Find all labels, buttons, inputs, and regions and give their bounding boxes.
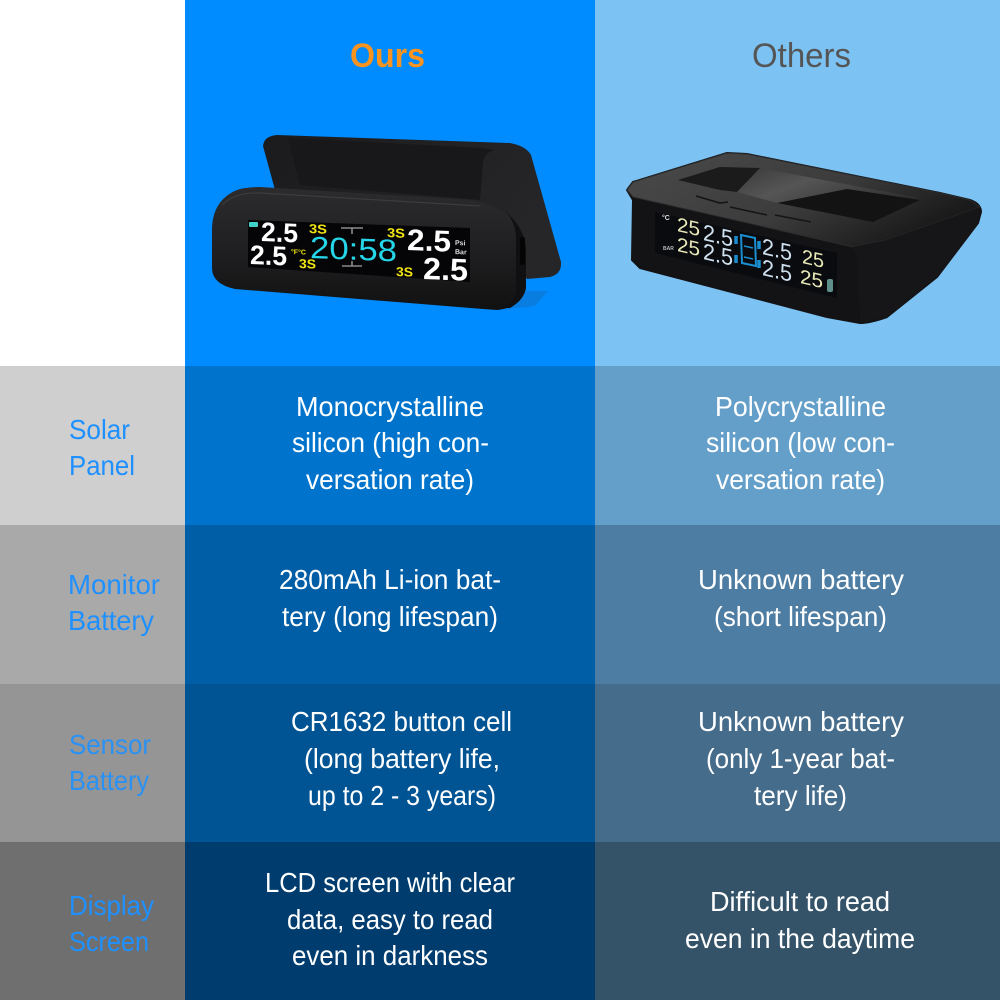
others text [698,706,904,811]
heading: Ours: Ours [350,37,425,75]
column header background: ours [185,0,595,366]
LCD readouts: 25 [677,214,700,241]
heading: Others: Others [752,37,851,75]
ours text: tery (long lifespan) [282,601,498,632]
row label: Battery [69,765,149,796]
row label: Battery [68,605,154,636]
LCD readouts: 25 [800,266,823,293]
row label [69,729,151,796]
ours text [292,391,489,495]
car icon [736,235,759,268]
LCD readouts: 2.5 [423,251,468,288]
LCD readouts: 25 [802,246,824,273]
ours text: 280mAh Li-ion bat- [279,564,501,595]
others text [685,886,915,954]
ours text: data, easy to read [287,904,493,935]
row label: Screen [69,926,149,957]
ours text: silicon (high con- [292,427,489,458]
column header background: others [595,0,1000,366]
others text: Unknown battery [698,564,904,595]
others text: (short lifespan) [714,601,887,632]
row label: Sensor [69,729,151,760]
LCD readouts: 2.5 [762,233,792,266]
battery icon [827,279,833,292]
row: Sensor Battery [0,684,1000,842]
device shadow [500,291,548,310]
row: Monitor Battery [0,525,1000,684]
LCD readouts: 3S [387,225,405,241]
row label [69,890,154,957]
row label: Display [69,890,154,921]
others text: versation rate) [716,464,885,495]
solar panel back [263,135,561,279]
LCD readouts: 3S [299,256,316,272]
LCD readouts: 3S [309,221,327,237]
others text: Difficult to read [710,886,890,917]
LCD readouts: 2.5 [762,254,792,287]
row label: Panel [69,450,135,481]
ours text [279,564,501,632]
solar panels [678,167,920,222]
top shell [627,153,980,247]
row label: Solar [69,414,130,445]
product photo: others device [627,153,981,323]
row: Display Screen [0,842,1000,1000]
LCD readouts: °F°C [291,248,306,257]
others text: Unknown battery [698,706,904,737]
others text: even in the daytime [685,923,915,954]
LCD readouts [662,214,824,293]
ours text: Monocrystalline [296,391,484,422]
LCD readouts: °C [662,214,670,222]
LCD readouts: 2.5 [407,224,451,259]
row: Solar Panel [0,366,1000,525]
column header background: blank [0,0,185,366]
LCD readouts: 2.5 [261,217,298,248]
LCD readouts: Bar [455,249,467,256]
LCD readouts: BAR [663,246,674,252]
LCD screen [655,212,837,298]
others text [706,391,895,495]
others text: Polycrystalline [715,391,886,422]
others text: silicon (low con- [706,427,895,458]
LCD readouts: 25 [677,234,700,261]
LCD screen [248,220,470,282]
LCD readouts: Psi [455,240,466,247]
LCD readouts: 2.5 [703,219,733,252]
others text: (only 1-year bat- [706,743,895,774]
product photo: ours device [212,135,561,310]
ours text: CR1632 button cell [291,706,512,737]
ours text: up to 2 - 3 years) [308,780,496,811]
row label [69,414,135,481]
ours text [291,706,512,811]
buttons [696,196,811,222]
others text: tery life) [754,780,847,811]
LCD readouts [249,217,468,288]
ours text [265,867,515,971]
device body [212,187,526,310]
device body [627,153,981,323]
row label [68,569,160,636]
ours text: (long battery life, [304,743,500,774]
product photo: ours device: 20:58 [310,230,397,268]
LCD readouts: 3S [396,264,413,280]
LCD readouts: 2.5 [250,240,287,271]
ours text: versation rate) [306,464,474,495]
others text [698,564,904,632]
LCD readouts: 2.5 [703,238,733,271]
row label: Monitor [68,569,160,600]
ours text: even in darkness [292,940,488,971]
ours text: LCD screen with clear [265,867,515,898]
